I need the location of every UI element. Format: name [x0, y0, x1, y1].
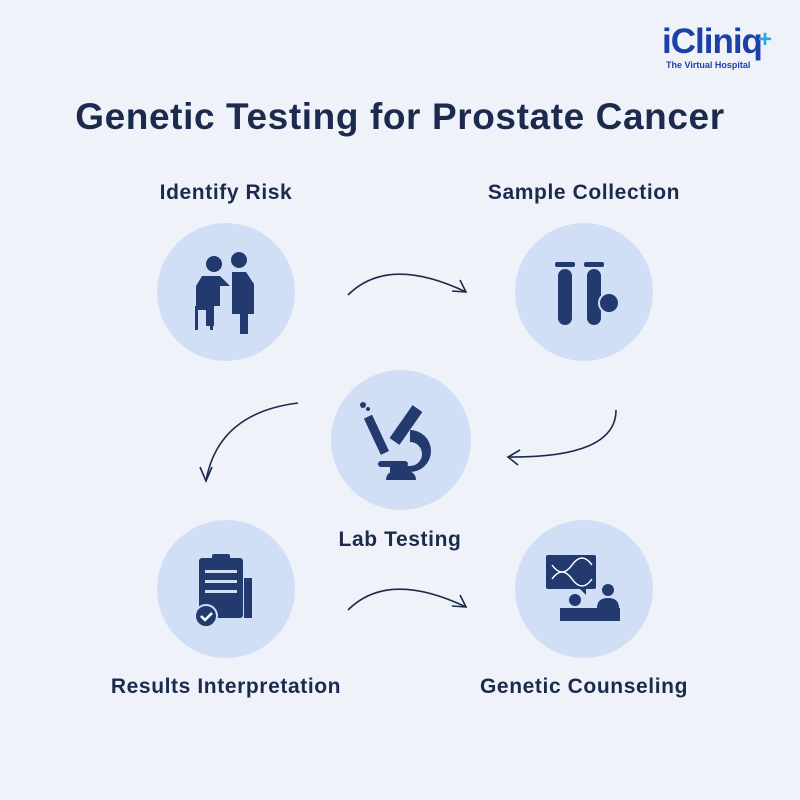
arrow: risk to sample	[348, 274, 466, 295]
label: identify risk: Identify Risk	[160, 181, 292, 204]
title: Genetic Testing for Prostate Cancer	[75, 96, 725, 137]
logo: +	[758, 26, 772, 53]
arrow: lab to results	[200, 403, 298, 481]
label: lab testing: Lab Testing	[339, 528, 461, 551]
circle: sample collection	[515, 223, 653, 361]
logo: The Virtual Hospital	[666, 60, 750, 70]
label: sample collection: Sample Collection	[488, 181, 680, 204]
circle: results interpretation	[157, 520, 295, 658]
label: genetic counseling: Genetic Counseling	[480, 675, 688, 698]
logo: iCliniq	[662, 22, 762, 61]
arrow: sample to lab	[508, 410, 616, 465]
arrow: results to counseling	[348, 589, 466, 610]
label: results interpretation: Results Interpretation	[111, 675, 341, 698]
circle: genetic counseling	[515, 520, 653, 658]
circle: lab testing	[331, 370, 471, 510]
circle: identify risk	[157, 223, 295, 361]
